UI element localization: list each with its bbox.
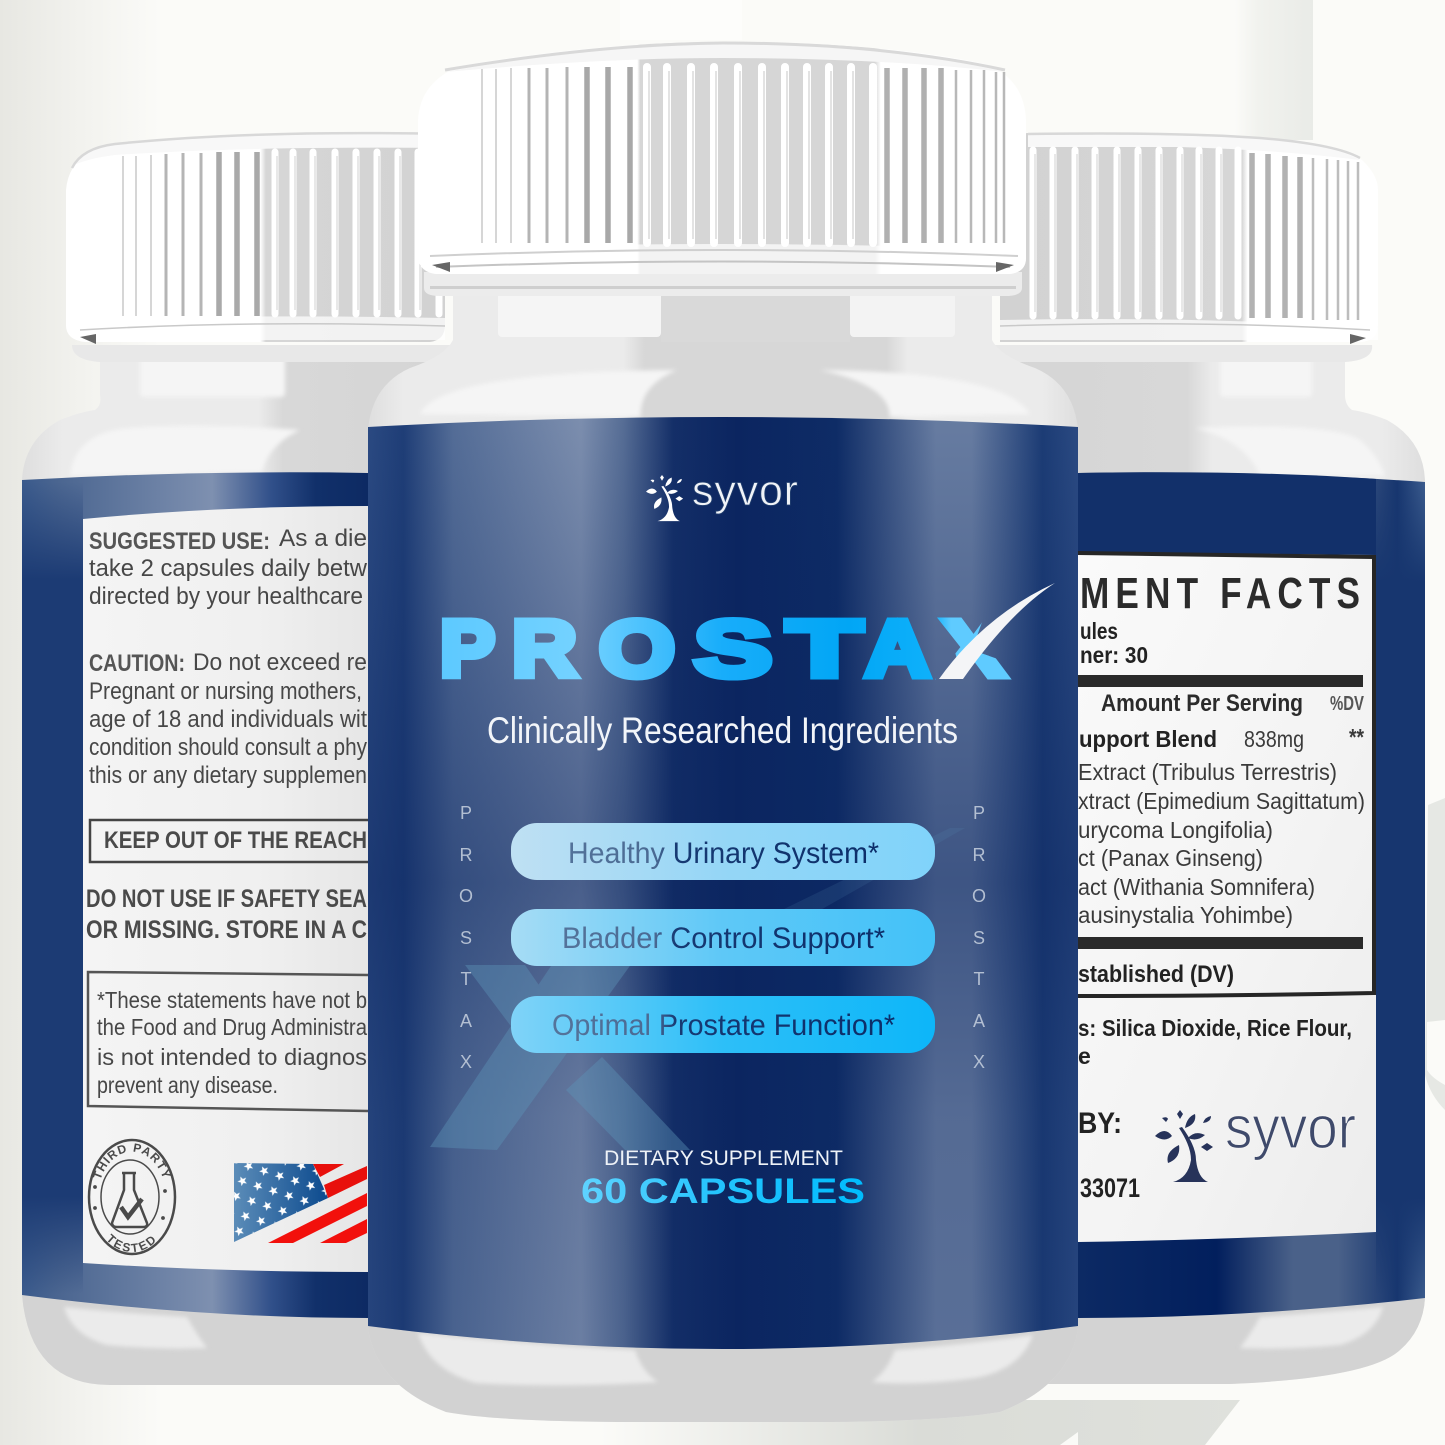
- vertical text right: [972, 803, 986, 1072]
- vertical text right: R: [972, 845, 986, 865]
- safety warning: DO NOT USE IF SAFETY SEA: [86, 885, 367, 913]
- serving info: ules: [1080, 618, 1118, 644]
- prostax logo: A: [865, 604, 930, 693]
- suggested use text: take 2 capsules daily betw: [89, 555, 368, 582]
- vertical text left: [459, 803, 473, 1072]
- suggested use text: directed by your healthcare: [89, 583, 363, 610]
- left bottle highlights: [64, 352, 300, 1349]
- caution text: [89, 649, 367, 789]
- vertical text right: X: [973, 1052, 985, 1072]
- dietary supplement label: DIETARY SUPPLEMENT: [604, 1147, 843, 1170]
- right bottle navy label: [1078, 472, 1425, 1318]
- ingredient rows: 838mg: [1244, 726, 1304, 752]
- suggested use text: SUGGESTED USE:: [89, 528, 270, 555]
- icon: third party tested badge: [88, 1138, 176, 1256]
- center bottle body: [368, 288, 1078, 1422]
- caution text: CAUTION:: [89, 650, 185, 677]
- left bottle base shade: [22, 1290, 430, 1385]
- base highlights: [418, 1333, 1033, 1385]
- cap: [418, 42, 1026, 274]
- pill: optimal prostate function: [511, 996, 935, 1053]
- prostax logo: R: [512, 604, 577, 693]
- vertical text right: P: [973, 803, 985, 823]
- right label side strip: [1376, 485, 1425, 1295]
- right bottle base shade: [1000, 1290, 1425, 1384]
- vertical text left: R: [460, 845, 472, 865]
- pill: optimal prostate function: Optimal Prostate Function*: [552, 1009, 895, 1042]
- serving info: ner: 30: [1080, 642, 1148, 668]
- prostax logo: O: [599, 604, 675, 693]
- ingredient rows: ausinystalia Yohimbe): [1078, 902, 1293, 928]
- ingredient rows: upport Blend: [1079, 726, 1217, 752]
- vertical text left: X: [460, 1052, 472, 1072]
- tagline: Clinically Researched Ingredients: [487, 710, 958, 751]
- supplement facts box: [1078, 553, 1374, 996]
- vertical text left: P: [460, 803, 472, 823]
- vertical text left: S: [460, 928, 472, 948]
- vertical text left: T: [460, 969, 472, 989]
- other ingredients: e: [1078, 1043, 1091, 1069]
- disclaimer box: *These statements have not b: [97, 987, 367, 1013]
- left label side strip: [22, 482, 83, 1294]
- vertical text right: O: [972, 886, 986, 906]
- left bottle navy label: [22, 472, 368, 1318]
- right bottle highlights: [1195, 352, 1385, 1349]
- ingredient rows: Extract (Tribulus Terrestris): [1078, 759, 1337, 785]
- shoulder highlights: [420, 370, 1030, 417]
- prostax logo: P: [440, 604, 495, 693]
- keep out of reach box: KEEP OUT OF THE REACH: [104, 827, 367, 854]
- left white panel: [83, 506, 368, 1272]
- daily value note: stablished (DV): [1078, 961, 1234, 988]
- pill: bladder control support: Bladder Control Support*: [562, 922, 885, 955]
- ingredient rows: [1078, 724, 1365, 928]
- ingredient rows: urycoma Longifolia): [1078, 817, 1273, 843]
- prostax logo: T: [787, 604, 862, 693]
- ingredient rows: ct (Panax Ginseng): [1078, 845, 1263, 871]
- supplement facts heading: MENT FACTS: [1080, 569, 1360, 618]
- right bottle cap: [995, 133, 1378, 362]
- syvor logo white: syvor: [692, 467, 798, 515]
- serving info: [1080, 618, 1148, 668]
- right bottle: supplement facts: [995, 133, 1425, 1384]
- safety warning: OR MISSING. STORE IN A C: [86, 916, 367, 944]
- prostax logo: X: [942, 604, 1005, 693]
- center navy label: [368, 417, 1078, 1349]
- caution text: Do not exceed re: [193, 649, 367, 676]
- manufacturer text: BY:: [1078, 1107, 1122, 1140]
- other ingredients: s: Silica Dioxide, Rice Flour,: [1078, 1015, 1352, 1041]
- center bottle: [368, 42, 1078, 1422]
- ingredient rows: act (Withania Somnifera): [1078, 874, 1315, 900]
- center bottle base shade: [368, 1320, 1078, 1422]
- pill: healthy urinary system: Healthy Urinary System*: [568, 837, 879, 870]
- 60 capsules: 60 CAPSULES: [581, 1172, 865, 1211]
- ingredient rows: **: [1349, 724, 1364, 750]
- icon: american flag: [234, 1163, 367, 1243]
- suggested use text: [89, 525, 368, 610]
- manufacturer text: [1078, 1107, 1140, 1203]
- table header: %DV: [1330, 693, 1364, 715]
- right label top band: [1078, 472, 1376, 560]
- caution text: this or any dietary supplemen: [89, 762, 367, 789]
- disclaimer box: the Food and Drug Administra: [97, 1014, 367, 1040]
- syvor logo dark: [1155, 1094, 1356, 1182]
- vertical text left: O: [459, 886, 473, 906]
- caution text: condition should consult a phy: [89, 734, 367, 761]
- table header: Amount Per Serving: [1101, 690, 1303, 717]
- vertical text right: A: [973, 1011, 985, 1031]
- icon: third party tested badge: TESTED: [108, 1234, 155, 1252]
- syvor logo dark: syvor: [1225, 1094, 1356, 1161]
- icon: third party tested badge: THIRD PARTY: [93, 1143, 171, 1178]
- keep out of reach box: [90, 820, 368, 862]
- pill: bladder control support: [511, 909, 935, 966]
- disclaimer box: [88, 972, 368, 1111]
- pill: healthy urinary system: [511, 823, 935, 880]
- caution text: Pregnant or nursing mothers,: [89, 678, 362, 705]
- safety warning: [86, 885, 367, 944]
- vertical text left: A: [460, 1011, 472, 1031]
- neck: [424, 272, 1022, 342]
- left bottle cap: [66, 133, 450, 362]
- vertical text right: S: [973, 928, 985, 948]
- faint x watermark: [430, 828, 965, 1150]
- manufacturer text: 33071: [1080, 1173, 1140, 1203]
- left bottle body: [22, 358, 430, 1385]
- syvor logo white: [646, 467, 798, 521]
- vertical text right: T: [974, 969, 984, 989]
- prostax logo: S: [694, 604, 772, 693]
- right white panel: [1078, 552, 1376, 1242]
- left bottle: back label: [22, 132, 450, 1385]
- other ingredients: [1078, 1015, 1352, 1069]
- suggested use text: As a die: [279, 525, 367, 552]
- logo swoosh: [939, 583, 1055, 679]
- ingredient rows: xtract (Epimedium Sagittatum): [1078, 788, 1365, 814]
- caution text: age of 18 and individuals wit: [89, 706, 367, 733]
- disclaimer box: prevent any disease.: [97, 1072, 278, 1098]
- disclaimer box: is not intended to diagnos: [97, 1044, 367, 1070]
- prostax logo: [442, 583, 1055, 680]
- right bottle body: [1000, 358, 1425, 1384]
